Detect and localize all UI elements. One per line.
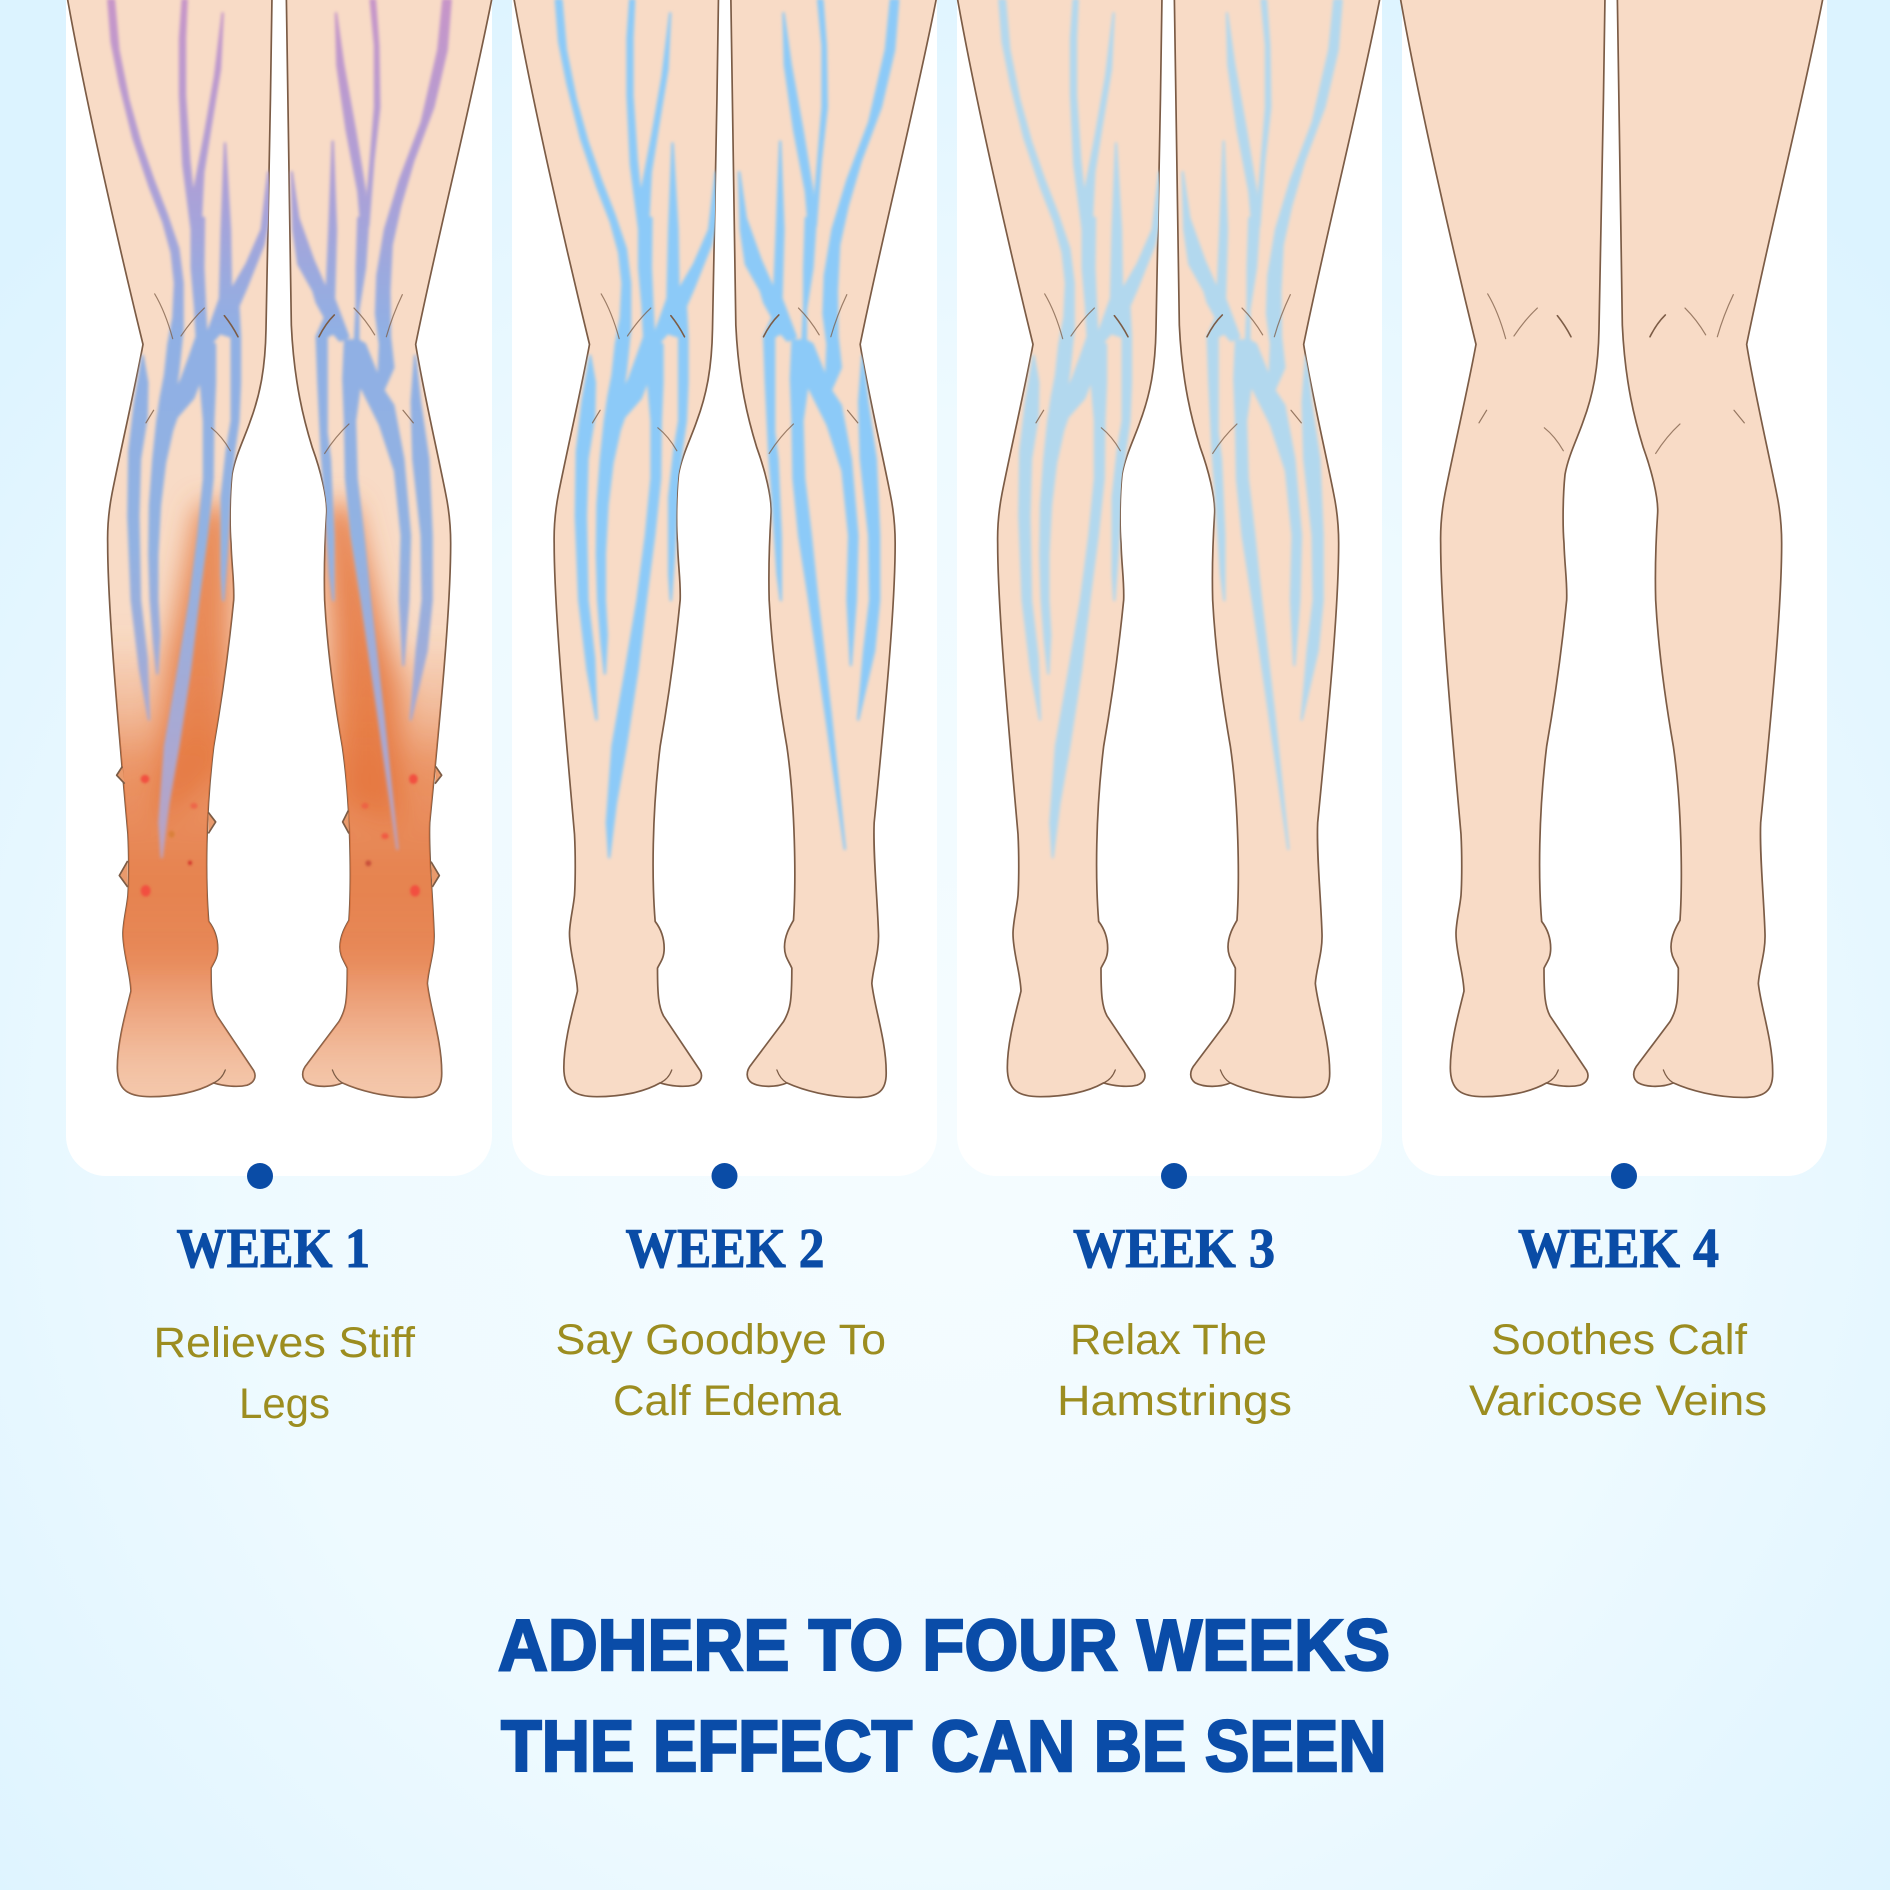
- panel: week 2 card: [512, 0, 937, 1176]
- illustration: week 1 legs with inflamed calves and dark veins: [67, 0, 492, 1129]
- panel: week 3 card: [957, 0, 1382, 1176]
- title: [498, 1606, 1390, 1787]
- timeline dot week 2: [712, 1163, 738, 1189]
- title: ADHERE TO FOUR WEEKS: [498, 1606, 1390, 1686]
- heading: week 2: WEEK 2: [626, 1218, 824, 1280]
- panel: week 1 card: [66, 0, 492, 1176]
- illustration: week 2 legs with bright blue veins: [513, 0, 937, 1097]
- timeline dot week 1: [247, 1163, 273, 1189]
- heading: week 4: WEEK 4: [1518, 1218, 1719, 1280]
- text block: week 3 benefit: [1057, 1316, 1292, 1425]
- heading: week 3: WEEK 3: [1073, 1218, 1275, 1280]
- text block: week 3 benefit: Hamstrings: [1057, 1377, 1292, 1425]
- timeline dot week 4: [1611, 1163, 1637, 1189]
- text block: week 4 benefit: Soothes Calf: [1491, 1316, 1748, 1364]
- text block: week 2 benefit: Calf Edema: [613, 1377, 841, 1425]
- text block: week 1 benefit: Relieves Stiff: [154, 1319, 416, 1367]
- timeline dot week 3: [1161, 1163, 1187, 1189]
- heading: week 1: WEEK 1: [176, 1218, 370, 1280]
- text block: week 2 benefit: [556, 1316, 886, 1425]
- illustration: week 3 legs with pale veins: [957, 0, 1380, 1097]
- text block: week 4 benefit: [1469, 1316, 1767, 1425]
- text block: week 4 benefit: Varicose Veins: [1469, 1377, 1767, 1425]
- swelling bumps on calves: [117, 766, 442, 887]
- title: THE EFFECT CAN BE SEEN: [501, 1707, 1386, 1787]
- text block: week 3 benefit: Relax The: [1070, 1316, 1267, 1364]
- text block: week 1 benefit: [154, 1319, 416, 1428]
- text block: week 2 benefit: Say Goodbye To: [556, 1316, 886, 1364]
- text block: week 1 benefit: Legs: [239, 1380, 330, 1428]
- panel: week 4 card: [1402, 0, 1827, 1176]
- illustration: week 4 clear legs: [1400, 0, 1823, 1097]
